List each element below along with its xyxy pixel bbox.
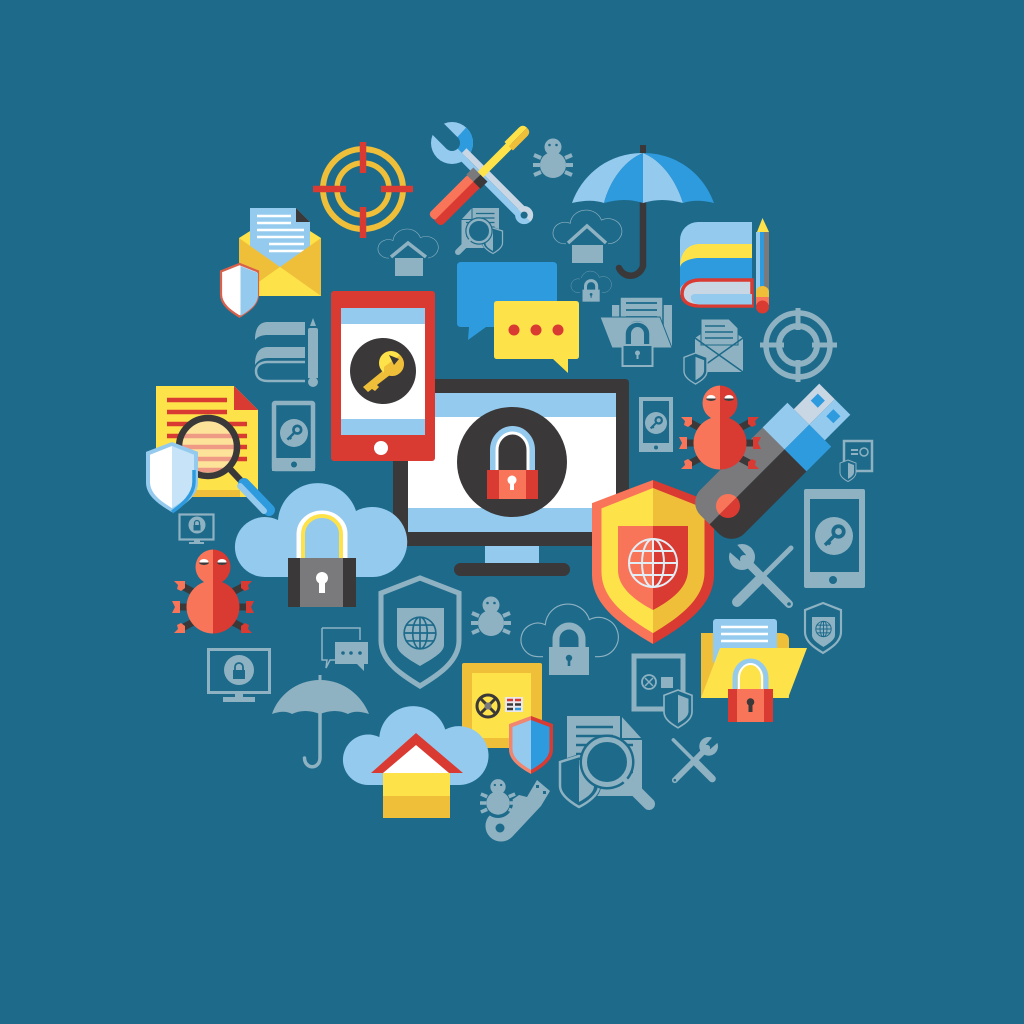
icon: red bug right [679, 386, 761, 470]
icon: grey shield with globe [381, 578, 459, 686]
icon: grey safe with shield [634, 656, 692, 728]
icon: crosshair target [313, 142, 413, 238]
icon: yellow folder with red lock [701, 619, 807, 722]
icon: envelope with letter and shield [221, 208, 321, 317]
icon: grey bug and USB [480, 779, 550, 842]
icon: grey document magnifier small [458, 208, 504, 254]
icon: grey tools small [673, 734, 721, 781]
icon: blue umbrella [572, 145, 714, 276]
icon: grey cloud outline with lock [521, 604, 618, 675]
icon: yellow document with magnifier [156, 386, 269, 511]
icon: yellow safe [462, 663, 542, 748]
icon: grey box with shield far right [840, 441, 872, 482]
icon: grey document magnifier shield [558, 716, 649, 809]
icon: grey tools [725, 540, 791, 606]
icon: cloud with house [343, 706, 489, 818]
icon: grey big phone with key [804, 489, 865, 588]
icon: grey cloud with lock small [571, 271, 611, 302]
icon: grey envelope with shield [684, 319, 743, 384]
icon: grey bug top [533, 138, 573, 178]
icon: grey folder with lock [600, 297, 672, 366]
icon: grey books and pencil [255, 318, 318, 387]
icon: grey phone with key [272, 403, 315, 471]
icon: main monitor with padlock [393, 379, 629, 576]
icon: grey chat bubbles [322, 628, 368, 671]
icon: cloud with black padlock [235, 483, 407, 607]
icon: grey small phone with key [639, 399, 673, 452]
icon: grey cloud with house [378, 229, 438, 276]
icon: book with pencil [680, 218, 769, 314]
icon: USB stick [688, 377, 857, 546]
icon: red phone with gold key [331, 291, 435, 461]
icon: grey umbrella [272, 675, 369, 767]
icon: grey target [760, 308, 837, 382]
icon: wrench and screwdriver [419, 110, 545, 236]
icon: white and blue shield [146, 442, 198, 512]
icon: yellow speech bubble with dots [494, 301, 579, 373]
icon: grey monitor with lock [208, 650, 270, 702]
icon: grey bug middle [471, 596, 511, 636]
icon: big red and yellow shield with globe [592, 480, 714, 644]
icon: grey small monitor with lock [180, 514, 214, 544]
icon: blue speech bubble [457, 262, 557, 340]
icon: grey small shield with globe [805, 603, 841, 653]
icon: grey cloud with house right [553, 210, 622, 263]
icon: blue shield with red border [509, 716, 553, 774]
icon: red bug left [172, 550, 254, 634]
